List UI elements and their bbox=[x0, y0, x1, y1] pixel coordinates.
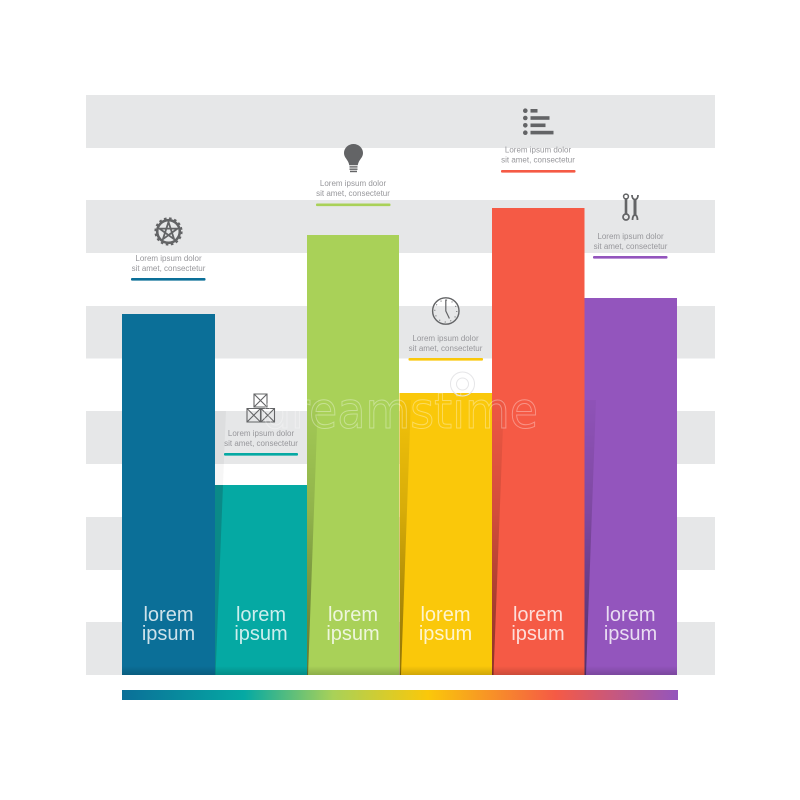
callout: tools: Lorem ipsum dolor bbox=[597, 232, 664, 241]
callout: clock: sit amet, consectetur bbox=[409, 344, 483, 353]
bar 5: red: ipsum bbox=[511, 623, 565, 645]
gradient scale bar bbox=[122, 690, 678, 700]
bar 4: yellow: ipsum bbox=[419, 623, 472, 645]
callout: gear bbox=[131, 218, 206, 281]
callout: gear: Lorem ipsum dolor bbox=[135, 254, 202, 263]
bar 6: purple: ipsum bbox=[604, 623, 657, 645]
bar 3: green: lorem bbox=[328, 604, 378, 626]
callout: gear: sit amet, consectetur bbox=[132, 264, 206, 273]
bar 3: green bbox=[307, 235, 399, 675]
bar 3: green: ipsum bbox=[326, 623, 380, 645]
bar 2: teal: lorem bbox=[236, 604, 286, 626]
callout: boxes: sit amet, consectetur bbox=[224, 439, 298, 448]
bar 5: red: lorem bbox=[513, 604, 563, 626]
callout: list: Lorem ipsum dolor bbox=[505, 146, 571, 154]
watermark: dreamstime bbox=[262, 382, 538, 440]
bar 2: teal bbox=[215, 411, 307, 675]
bar 1: blue: lorem bbox=[143, 604, 194, 626]
icon: stacked boxes bbox=[247, 394, 274, 422]
bar base shadow bbox=[122, 666, 677, 675]
bar 1: blue bbox=[122, 314, 215, 675]
bar 6: purple: lorem bbox=[605, 604, 656, 626]
icon: light bulb bbox=[344, 144, 363, 172]
bar 1: blue: ipsum bbox=[142, 623, 195, 645]
icon: list bbox=[523, 108, 554, 135]
callout: list: sit amet, consectetur bbox=[501, 156, 575, 164]
bar 5: red bbox=[492, 208, 584, 675]
callout: clock: Lorem ipsum dolor bbox=[412, 334, 479, 343]
icon: clock bbox=[433, 298, 459, 324]
callout: clock bbox=[408, 298, 483, 361]
icon: gear bbox=[155, 218, 182, 245]
callout: tools bbox=[593, 194, 668, 259]
callout: tools: sit amet, consectetur bbox=[594, 242, 668, 251]
bar 4: yellow: lorem bbox=[420, 604, 471, 626]
bar 4: yellow bbox=[400, 393, 492, 675]
callout: bulb: Lorem ipsum dolor bbox=[320, 179, 386, 188]
callout: boxes bbox=[224, 394, 298, 456]
callout: bulb: sit amet, consectetur bbox=[316, 189, 390, 198]
icon: wrenches bbox=[623, 194, 638, 220]
callout: bulb bbox=[316, 144, 390, 206]
callout: boxes: Lorem ipsum dolor bbox=[228, 429, 294, 438]
callout: list bbox=[501, 108, 576, 173]
bar 2: teal: ipsum bbox=[234, 623, 288, 645]
background bands bbox=[86, 95, 715, 675]
bar 6: purple bbox=[584, 298, 677, 675]
